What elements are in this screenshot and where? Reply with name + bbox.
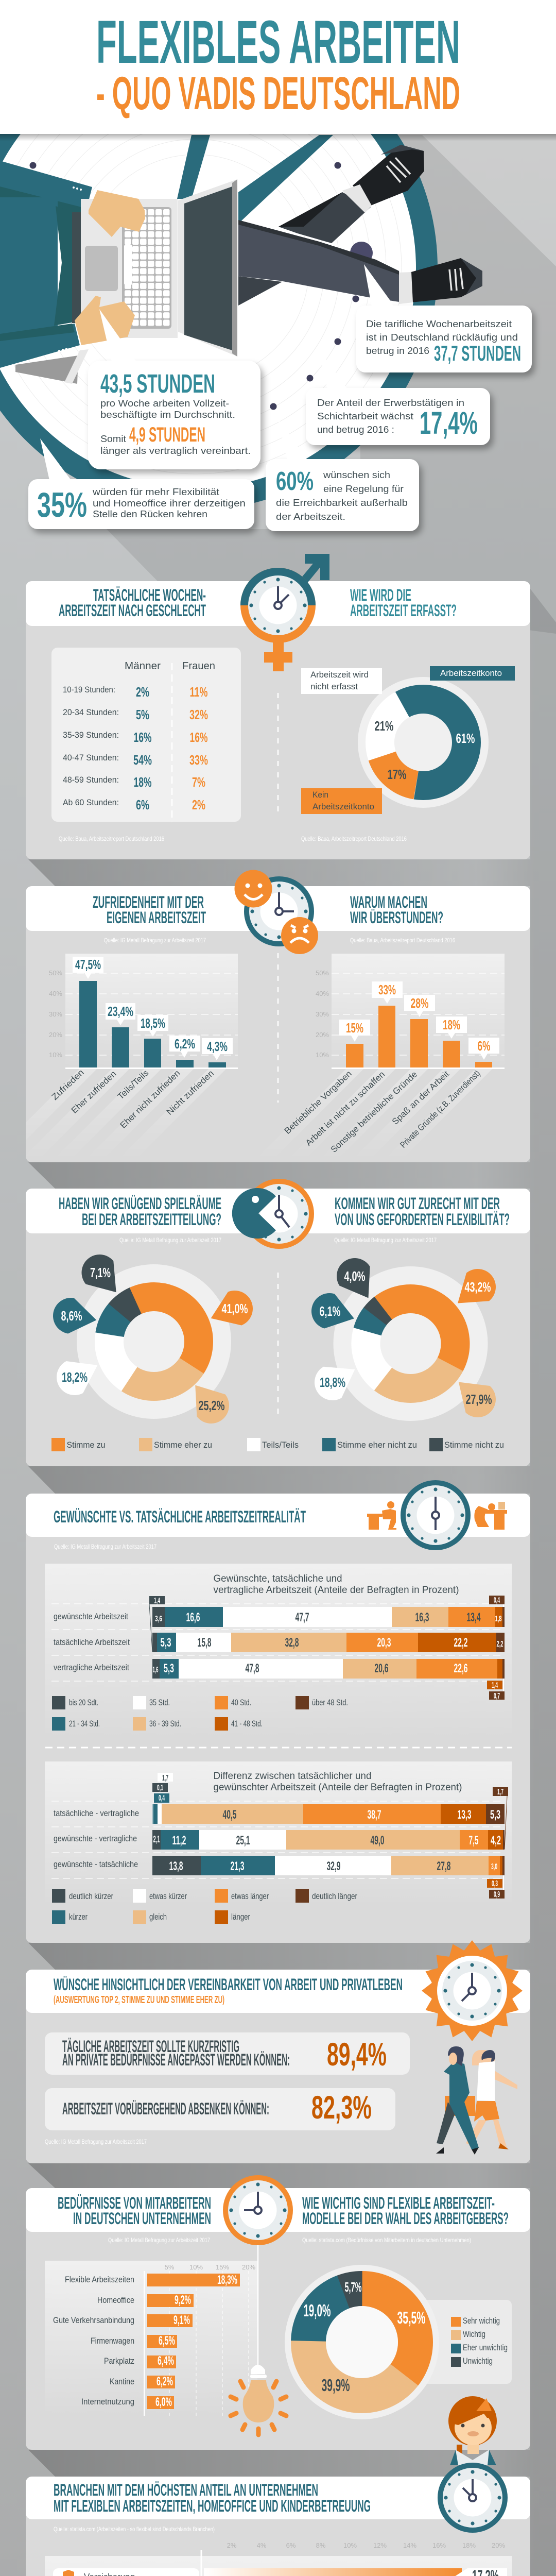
heading: [54, 2481, 371, 2515]
bar chart: Branchen: 14%: [403, 2541, 416, 2549]
sources: Quelle: Baua, Arbeitszeitreport Deutschland 2016: [59, 835, 164, 842]
callout: 37,7 Stunden: Die tarifliche Wochenarbeitszeit: [366, 319, 512, 329]
donut: Spielräume: 25,2%: [199, 1398, 224, 1413]
bar chart: Bedürfnisse: 9,1%: [173, 2313, 190, 2327]
hero illustration: person with laptop from above: [0, 37, 482, 499]
bar chart: Bedürfnisse: 10%: [189, 2263, 203, 2271]
bar chart: Bedürfnisse: Gute Verkehrsanbindung: [53, 2315, 134, 2325]
legend: Stimme zu: [67, 1440, 105, 1450]
stacked bar chart: Differenz: gewünschte - tatsächliche: [54, 1859, 138, 1869]
stacked bar chart: Arbeitszeit: 1,4: [154, 1597, 160, 1605]
stacked bar chart: Arbeitszeit: 15,8: [198, 1636, 211, 1650]
donut: Wichtigkeit: 19,0%: [304, 2301, 331, 2320]
bar chart: Bedürfnisse: [45, 2261, 257, 2416]
bar chart: Überstunden: [283, 954, 505, 1155]
donut: Spielräume: 18,2%: [62, 1369, 88, 1385]
stacked bar chart: Arbeitszeit: 22,2: [454, 1636, 467, 1650]
stacked bar chart: Arbeitszeit: 1,4: [492, 1681, 498, 1690]
callout: 43,5 Stunden: pro Woche arbeiten Vollzeit-: [100, 398, 229, 409]
stacked bar chart: Arbeitszeit: 47,8: [245, 1662, 259, 1675]
donut: Flexibilität: 27,9%: [465, 1392, 492, 1407]
stacked bar chart: Arbeitszeit: 32,8: [285, 1636, 299, 1650]
callout: 17,4%: [306, 348, 490, 445]
callout: 17,4%: 17,4%: [420, 405, 478, 440]
stacked bar chart: Arbeitszeit: 1,6: [152, 1666, 159, 1674]
heading right: [335, 1194, 510, 1229]
stacked bar chart: Arbeitszeit: tatsächliche Arbeitszeit: [54, 1637, 130, 1647]
bar chart: Zufriedenheit: [49, 954, 238, 1130]
donut: Arbeitszeit erfasst: 61%: [456, 731, 475, 746]
bar chart: Branchen: 8%: [316, 2541, 326, 2549]
heading right: [302, 2194, 509, 2228]
label streaks: [54, 1069, 492, 1095]
stacked bar chart: Arbeitszeit: 20,6: [375, 1662, 388, 1675]
bar chart: Zufriedenheit: 50%: [49, 969, 62, 977]
source: Quelle: statista.com (Arbeitszeiten - so flexibel sind Deutschlands Branchen): [54, 2526, 215, 2533]
donut: Spielräume: 8,6%: [61, 1308, 82, 1324]
heading left: HABEN WIR GENÜGEND SPIELRÄUME: [59, 1194, 221, 1213]
callout: 60%: 60%: [276, 466, 314, 496]
heading left: EIGENEN ARBEITSZEIT: [107, 908, 206, 927]
bar chart: Überstunden: 20%: [316, 1031, 329, 1039]
bar chart: Bedürfnisse: Parkplatz: [104, 2356, 134, 2366]
sources: Quelle: IG Metall Befragung zur Arbeitszeit 2017: [108, 2236, 210, 2244]
bar chart: Zufriedenheit: 47,5%: [75, 957, 101, 972]
bar chart: Überstunden: Arbeit ist nicht zu schaffen: [304, 1070, 387, 1148]
stacked bar chart: Differenz: 0,9: [494, 1890, 500, 1899]
sources: [119, 1236, 437, 1244]
stacked bar chart: Arbeitszeit: gewünschte Arbeitszeit: [54, 1612, 128, 1621]
bar chart: Bedürfnisse: Flexible Arbeitszeiten: [65, 2275, 134, 2284]
stacked bar chart: Differenz: 0,3: [492, 1879, 498, 1888]
bar chart: Überstunden: 15%: [346, 1020, 363, 1036]
stacked bar chart: Arbeitszeit: 21 - 34 Std.: [69, 1719, 100, 1728]
stacked bar chart: Arbeitszeit: 20,3: [377, 1636, 391, 1650]
stacked bar chart: Differenz: länger: [231, 1912, 250, 1922]
bar chart: Bedürfnisse: Homeoffice: [97, 2295, 134, 2305]
bar chart: Bedürfnisse: 9,2%: [175, 2293, 191, 2307]
panel: Bedürfnisse / Flexible Modelle: [26, 2175, 530, 2450]
table: Männer / Frauen: 16%: [189, 730, 208, 745]
sources: Quelle: Baua, Arbeitszeitreport Deutschland 2016: [301, 835, 407, 842]
stacked bar chart: Differenz: 3,0: [491, 1862, 497, 1871]
table: Männer / Frauen: 35-39 Stunden:: [63, 730, 119, 740]
donut: Arbeitszeit erfasst: [301, 666, 515, 814]
table: Männer / Frauen: 40-47 Stunden:: [63, 753, 119, 762]
stacked bar chart: Differenz: tatsächliche - vertragliche: [54, 1808, 139, 1818]
bar chart: Bedürfnisse: 6,5%: [159, 2334, 175, 2348]
donut: Arbeitszeit erfasst: 21%: [375, 718, 393, 734]
callout: 43,5 Stunden: 4,9 STUNDEN: [129, 423, 205, 446]
stat: 89,4%: TÄGLICHE ARBEITSZEIT SOLLTE KURZFRISTIG: [62, 2037, 239, 2056]
title band: [0, 0, 556, 141]
bar chart: Branchen: 10%: [343, 2541, 357, 2549]
donut: Flexibilität: 6,1%: [319, 1303, 341, 1319]
donut: Wichtigkeit: 5,7%: [345, 2279, 361, 2295]
heading right: [350, 586, 457, 620]
legend: Stimme eher zu: [154, 1440, 212, 1450]
stat: 89,4%: 89,4%: [327, 2037, 387, 2073]
sources: Quelle: Baua, Arbeitszeitreport Deutschland 2016: [350, 937, 455, 944]
heading left: TATSÄCHLICHE WOCHEN-: [93, 586, 206, 604]
callout: 35%: und Homeoffice ihrer derzeitigen: [93, 498, 246, 509]
source: Quelle: IG Metall Befragung zur Arbeitszeit 2017: [45, 2138, 147, 2145]
callout: 60%: der Arbeitszeit.: [276, 512, 345, 522]
callout: 17,4%: Schichtarbeit wächst: [317, 411, 413, 421]
panel: Vereinbarkeit von Arbeit und Privatleben: [26, 1940, 530, 2163]
icon: office workers clock: [367, 1480, 507, 1550]
stacked bar chart: Differenz: 13,8: [169, 1859, 183, 1873]
stacked bar chart: Differenz: gewünschter Arbeitszeit (Anteile der Befragten in Prozent): [213, 1782, 462, 1793]
sources: Quelle: IG Metall Befragung zur Arbeitszeit 2017: [334, 1236, 437, 1244]
bar chart: Überstunden: 18%: [443, 1017, 460, 1032]
stacked bar chart: Differenz: 0,4: [159, 1794, 165, 1803]
table: Männer / Frauen: 32%: [189, 707, 208, 722]
legend panel: Sehr wichtig: [463, 2316, 500, 2326]
bar chart: Bedürfnisse: 6,4%: [158, 2354, 174, 2368]
callout: 60%: wünschen sich: [323, 470, 390, 480]
stacked bar chart: Differenz: 11,2: [172, 1834, 186, 1848]
table: Männer / Frauen: Männer: [125, 660, 161, 672]
callout: 37,7 Stunden: betrug in 2016: [366, 346, 429, 356]
legend panel: [412, 2300, 512, 2384]
donut: Arbeitszeit erfasst: Arbeitszeitkonto: [312, 802, 374, 811]
stat: 89,4%: AN PRIVATE BEDÜRFNISSE ANGEPASST WERDEN KÖNNEN:: [62, 2050, 290, 2069]
heading left: [59, 586, 206, 620]
bar chart: Branchen: 6%: [286, 2541, 296, 2549]
stacked bar chart: Arbeitszeit: 35 Std.: [149, 1698, 170, 1707]
stacked bar chart: Arbeitszeit: 0,4: [494, 1596, 500, 1605]
sources: Quelle: IG Metall Befragung zur Arbeitszeit 2017: [104, 937, 206, 944]
bar chart: Überstunden: 33%: [378, 982, 396, 997]
callout: 60%: die Erreichbarkeit außerhalb: [276, 498, 408, 508]
table: Männer / Frauen: 48-59 Stunden:: [63, 775, 119, 785]
stacked bar chart: Differenz: 7,5: [468, 1834, 479, 1848]
heading right: WIE WIRD DIE: [350, 586, 411, 604]
bar chart: Zufriedenheit: 4,3%: [207, 1039, 228, 1054]
bar chart: Zufriedenheit: 40%: [49, 990, 62, 997]
stacked bar chart: Differenz: 27,8: [437, 1859, 451, 1873]
bar chart: Überstunden: Private Gründe (z.B. Zuverdienst): [398, 1069, 482, 1150]
bar chart: Branchen: 2%: [227, 2541, 237, 2549]
legend panel: Wichtig: [463, 2329, 485, 2339]
donut: Arbeitszeit erfasst: nicht erfasst: [310, 682, 358, 691]
stacked bar chart: Arbeitszeit: 16,3: [415, 1611, 429, 1624]
bar chart: Überstunden: Sonstige betriebliche Gründe: [329, 1070, 419, 1155]
bar chart: Zufriedenheit: Zufrieden: [50, 1067, 86, 1102]
illustration: two people: [436, 2046, 517, 2155]
bar chart: Zufriedenheit: Eher zufrieden: [70, 1069, 118, 1115]
bar chart: Überstunden: 28%: [411, 995, 428, 1011]
stacked bar chart: Differenz: gewünschte - vertragliche: [54, 1834, 137, 1843]
table: Männer / Frauen: 6%: [136, 797, 149, 812]
stacked bar chart: Arbeitszeit: 0,7: [494, 1692, 500, 1701]
table: Männer / Frauen: 10-19 Stunden:: [63, 685, 115, 694]
callout: 35%: Stelle den Rücken kehren: [93, 509, 207, 519]
table: Männer / Frauen: [51, 648, 241, 822]
panel: Wochenarbeitszeit nach Geschlecht / Erfassung: [26, 554, 530, 859]
legend: Stimme eher nicht zu: [337, 1440, 417, 1450]
bar chart: Überstunden: 30%: [316, 1010, 329, 1018]
donut: Spielräume: 7,1%: [90, 1265, 111, 1280]
bar chart: Zufriedenheit: Nicht zufrieden: [165, 1069, 216, 1117]
bar chart: Bedürfnisse: 18,3%: [217, 2273, 237, 2287]
bar chart: Überstunden: 10%: [316, 1051, 329, 1059]
stacked bar chart: Arbeitszeit: 22,6: [454, 1662, 467, 1675]
stacked bar chart: Arbeitszeit: 16,6: [186, 1611, 200, 1624]
donut: Flexibilität: 18,8%: [320, 1375, 345, 1390]
bar chart: Branchen: [45, 2541, 512, 2576]
callout: 60%: [266, 419, 419, 531]
table: Männer / Frauen: Ab 60 Stunden:: [63, 798, 119, 807]
legend: [51, 1438, 504, 1451]
donut: Arbeitszeit erfasst: Arbeitszeitkonto: [440, 668, 502, 678]
callout: 35%: 35%: [37, 485, 87, 524]
stacked bar chart: Differenz: 21,3: [231, 1859, 244, 1873]
bar chart: Bedürfnisse: Kantine: [110, 2377, 134, 2386]
bar chart: Bedürfnisse: 20%: [242, 2263, 255, 2271]
stacked bar chart: Arbeitszeit: vertragliche Arbeitszeit: [54, 1663, 129, 1672]
stacked bar chart: Differenz: etwas kürzer: [149, 1891, 187, 1901]
bar chart: Bedürfnisse: 6,2%: [157, 2375, 173, 2388]
donut: Wichtigkeit: 35,5%: [397, 2308, 425, 2327]
icon: gender clock: [240, 554, 329, 671]
table: Männer / Frauen: 11%: [189, 684, 208, 700]
sources: Quelle: statista.com (Bedürfnisse von Mitarbeitern in deutschen Unternehmen): [302, 2236, 471, 2244]
stacked bar chart: Arbeitszeit: 1,8: [495, 1615, 502, 1623]
heading left: BEDÜRFNISSE VON MITARBEITERN: [58, 2194, 211, 2212]
stacked bar chart: Differenz: deutlich länger: [312, 1891, 357, 1901]
legend panel: Unwichtig: [463, 2356, 493, 2366]
heading left: [58, 2194, 211, 2228]
callout: 17,4%: und betrug 2016 :: [317, 425, 394, 435]
heading left: [59, 1194, 221, 1229]
stat: 82,3%: [45, 2088, 395, 2130]
bar chart: Bedürfnisse: Firmenwagen: [91, 2336, 134, 2346]
bar chart: Überstunden: Spaß an der Arbeit: [390, 1069, 451, 1127]
bar chart: Branchen: 12%: [373, 2541, 387, 2549]
heading right: [350, 893, 443, 927]
table: Männer / Frauen: 16%: [134, 730, 151, 745]
sources: [104, 937, 455, 944]
heading: (AUSWERTUNG TOP 2, STIMME ZU UND STIMME EHER ZU): [54, 1994, 224, 2006]
stacked bar chart: Differenz: 32,9: [326, 1859, 341, 1873]
stacked bar chart: Differenz: 1,7: [162, 1774, 168, 1783]
stacked bar chart: Arbeitszeit: 5,3: [164, 1662, 174, 1675]
bar chart: Zufriedenheit: 6,2%: [175, 1036, 195, 1052]
stat: 82,3%: 82,3%: [311, 2090, 372, 2126]
stacked bar chart: Arbeitszeit: 2,2: [496, 1640, 503, 1649]
stacked bar chart: Differenz: [45, 1761, 512, 1924]
bar chart: Überstunden: Betriebliche Vorgaben: [283, 1069, 354, 1136]
stacked bar chart: Arbeitszeit: 36 - 39 Std.: [149, 1719, 181, 1728]
table: Männer / Frauen: 2%: [192, 797, 205, 812]
icons: industries: [60, 2570, 77, 2576]
callout: 37,7 Stunden: ist in Deutschland rückläufig und: [366, 332, 518, 343]
donut: Arbeitszeit erfasst: 17%: [387, 767, 407, 782]
stacked bar chart: Differenz: kürzer: [69, 1912, 88, 1922]
bar chart: Branchen: 16%: [432, 2541, 446, 2549]
stacked bar chart: Differenz: 4,2: [491, 1834, 501, 1848]
bar chart: Überstunden: 40%: [316, 990, 329, 997]
donut: Arbeitszeit erfasst: Arbeitszeit wird: [310, 670, 369, 680]
heading: BRANCHEN MIT DEM HÖCHSTEN ANTEIL AN UNTERNEHMEN: [54, 2481, 318, 2499]
table: Männer / Frauen: 2%: [136, 684, 149, 700]
bar chart: Branchen: 4%: [257, 2541, 267, 2549]
heading: [54, 1975, 403, 2006]
heading right: ARBEITSZEIT ERFASST?: [350, 601, 457, 620]
sources: [108, 2236, 471, 2244]
stacked bar chart: Differenz: deutlich kürzer: [69, 1891, 113, 1901]
stacked bar chart: Differenz: 40,5: [222, 1808, 237, 1822]
legend: Stimme nicht zu: [444, 1440, 504, 1450]
sources: Quelle: IG Metall Befragung zur Arbeitszeit 2017: [119, 1236, 221, 1244]
bar chart: Zufriedenheit: 10%: [49, 1051, 62, 1059]
donut: Spielräume: [50, 1247, 258, 1431]
illustration: girl behind clock: [438, 2396, 508, 2533]
heading right: WARUM MACHEN: [350, 893, 427, 911]
table: Männer / Frauen: 18%: [134, 774, 151, 790]
stacked bar chart: Differenz: 0,1: [157, 1784, 163, 1792]
stacked bar chart: Arbeitszeit: [45, 1564, 512, 1739]
stacked bar chart: Arbeitszeit: vertragliche Arbeitszeit (Anteile der Befragten in Prozent): [213, 1585, 459, 1596]
bar chart: Zufriedenheit: 18,5%: [141, 1015, 165, 1031]
stacked bar chart: Arbeitszeit: bis 20 Sdt.: [69, 1698, 98, 1707]
icon: pacman clock: [232, 1179, 314, 1249]
callout: 37,7 Stunden: [356, 264, 532, 372]
stacked bar chart: Arbeitszeit: 40 Std.: [231, 1698, 251, 1707]
stacked bar chart: Differenz: Differenz zwischen tatsächlicher und: [213, 1771, 372, 1782]
stacked bar chart: Arbeitszeit: 5,3: [161, 1636, 171, 1650]
bar chart: Bedürfnisse: Internetnutzung: [81, 2397, 134, 2406]
callout: 43,5 Stunden: [88, 309, 260, 469]
stacked bar chart: Differenz: 5,3: [490, 1808, 500, 1822]
donut: Wichtigkeit: [285, 2265, 439, 2419]
donut: Spielräume: 41,0%: [221, 1301, 248, 1316]
table: Männer / Frauen: 5%: [136, 707, 149, 722]
stacked bar chart: Differenz: etwas länger: [231, 1891, 269, 1901]
bar chart: Überstunden: 50%: [316, 969, 329, 977]
bar chart: Branchen: 18%: [462, 2541, 476, 2549]
bar chart: Zufriedenheit: Eher nicht zufrieden: [118, 1068, 182, 1130]
donut: Flexibilität: 4,0%: [344, 1268, 366, 1284]
stat: 82,3%: ARBEITSZEIT VORÜBERGEHEND ABSENKEN KÖNNEN:: [62, 2099, 269, 2118]
heading right: WIR ÜBERSTUNDEN?: [350, 908, 443, 927]
heading left: IN DEUTSCHEN UNTERNEHMEN: [73, 2209, 211, 2228]
stacked bar chart: Arbeitszeit: Gewünschte, tatsächliche und: [213, 1573, 342, 1584]
table: Männer / Frauen: 33%: [189, 752, 208, 768]
callout: 35%: [28, 438, 254, 529]
stacked bar chart: Arbeitszeit: über 48 Std.: [312, 1698, 348, 1707]
stacked bar chart: Differenz: 49,0: [371, 1834, 384, 1848]
stacked bar chart: Differenz: 13,3: [457, 1808, 472, 1822]
stacked bar chart: Arbeitszeit: 41 - 48 Std.: [231, 1719, 263, 1728]
callout: 43,5 Stunden: 43,5 STUNDEN: [100, 369, 215, 398]
stacked bar chart: Differenz: 25,1: [236, 1834, 250, 1848]
heading left: ARBEITSZEIT NACH GESCHLECHT: [59, 601, 206, 620]
bar chart: Zufriedenheit: 30%: [49, 1010, 62, 1018]
stacked bar chart: Differenz: 2,1: [153, 1834, 160, 1844]
stacked bar chart: Arbeitszeit: 3,6: [155, 1615, 162, 1623]
table: Männer / Frauen: 54%: [133, 752, 152, 768]
heading: GEWÜNSCHTE VS. TATSÄCHLICHE ARBEITSZEITREALITÄT: [54, 1507, 306, 1526]
legend panel: Eher unwichtig: [463, 2343, 508, 2352]
bar chart: Zufriedenheit: Teils/Teils: [116, 1068, 151, 1101]
panel: Spielräume / Flexibilität: [26, 1179, 530, 1466]
heading left: BEI DER ARBEITSZEITTEILUNG?: [82, 1210, 221, 1229]
stacked bar chart: Differenz: 38,7: [368, 1808, 381, 1822]
source: Quelle: IG Metall Befragung zur Arbeitszeit 2017: [54, 1543, 157, 1550]
callout: 43,5 Stunden: beschäftigte im Durchschnitt.: [100, 410, 235, 420]
bar chart: Branchen: 20%: [492, 2541, 505, 2549]
panel: Gewünschte vs. tatsächliche Arbeitszeitrealität: [26, 1480, 530, 1943]
callout: 60%: eine Regelung für: [323, 484, 404, 494]
icon: clock with smileys: [235, 870, 318, 954]
donut: Arbeitszeit erfasst: Kein: [312, 790, 328, 800]
stacked bar chart: Differenz: gleich: [149, 1912, 167, 1922]
stacked bar chart: Arbeitszeit: 13,4: [466, 1611, 481, 1624]
icon: bulb with clock: [223, 2175, 293, 2435]
panel: Zufriedenheit / Überstunden: [0, 870, 530, 1162]
callout: 17,4%: Der Anteil der Erwerbstätigen in: [317, 398, 464, 408]
stacked bar chart: Arbeitszeit: 47,7: [296, 1611, 309, 1624]
donut: Flexibilität: [307, 1251, 503, 1425]
donut: Wichtigkeit: 39,9%: [321, 2376, 350, 2395]
callout: 43,5 Stunden: Somit: [100, 434, 126, 444]
bar chart: Bedürfnisse: 6,0%: [155, 2395, 172, 2409]
bar chart: Zufriedenheit: 20%: [49, 1031, 62, 1039]
heading left: [93, 893, 206, 927]
stat: 89,4%: [45, 2032, 410, 2075]
table: Männer / Frauen: 7%: [192, 774, 205, 790]
bar chart: Überstunden: 6%: [478, 1038, 490, 1054]
bar chart: Bedürfnisse: 15%: [216, 2263, 229, 2271]
icon: sun clock: [422, 1940, 523, 2041]
stacked bar chart: Differenz: 1,7: [497, 1788, 503, 1797]
sources: [59, 835, 407, 842]
table: Männer / Frauen: 20-34 Stunden:: [63, 707, 119, 717]
heading left: ZUFRIEDENHEIT MIT DER: [93, 893, 204, 911]
callout: 35%: würden für mehr Flexibilität: [92, 487, 219, 497]
bar chart: Zufriedenheit: 23,4%: [108, 1004, 133, 1019]
callout: 43,5 Stunden: länger als vertraglich vereinbart.: [100, 446, 251, 456]
panel: Branchen: [26, 2396, 551, 2576]
legend: Teils/Teils: [262, 1440, 299, 1450]
donut: Flexibilität: 43,2%: [464, 1279, 491, 1295]
bar chart: Bedürfnisse: 5%: [165, 2263, 175, 2271]
table: Männer / Frauen: Frauen: [182, 660, 215, 672]
